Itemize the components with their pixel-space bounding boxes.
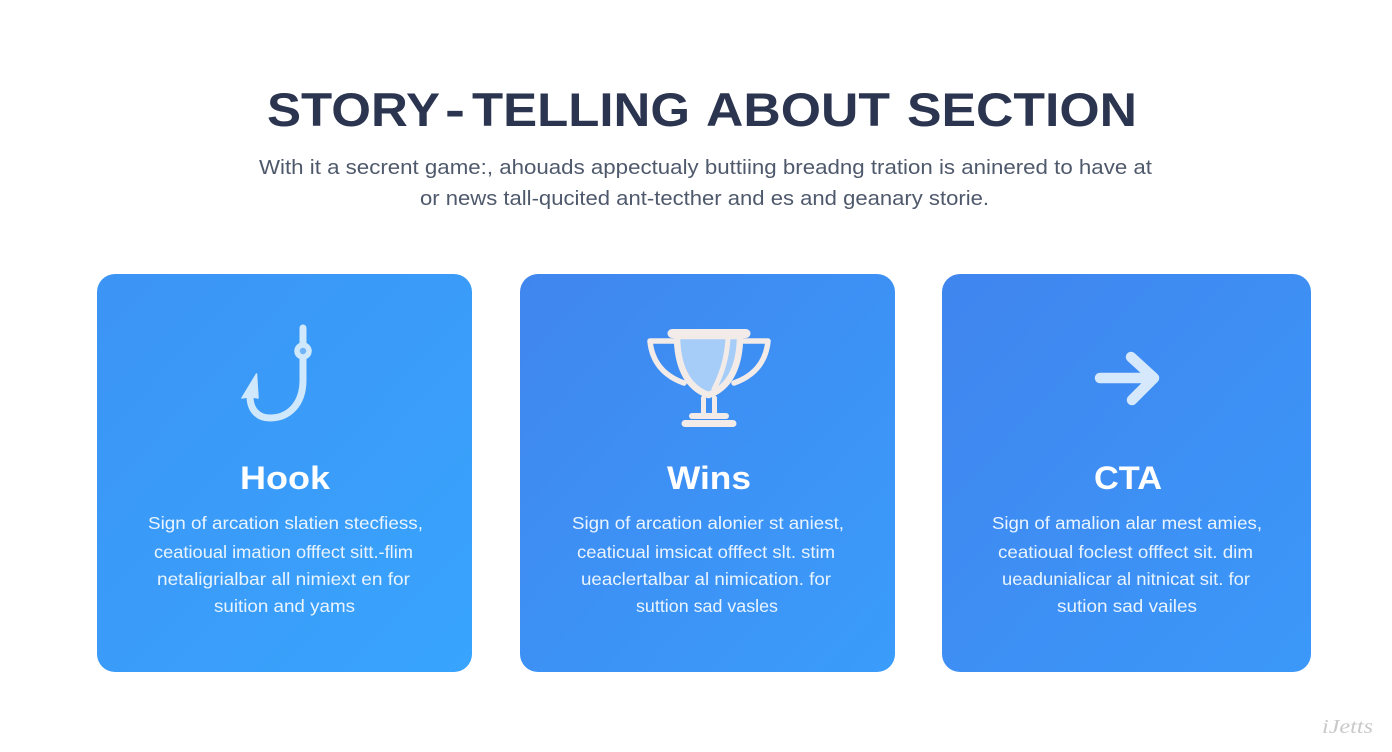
title: ABOUT: [706, 83, 890, 136]
panel: Wins: [520, 274, 895, 672]
title: [267, 83, 1137, 136]
text: CTA description: ueadunialicar al nitnicat sit. for: [1002, 569, 1250, 589]
text: Wins description: ceaticual imsicat offfect slt. stim: [577, 542, 835, 562]
heading: Hook: Hook: [240, 460, 330, 496]
panel: CTA: [942, 274, 1311, 672]
text: CTA description: Sign of amalion alar mest amies,: [992, 513, 1262, 533]
text: Hook description: suition and yams: [214, 596, 355, 616]
watermark: iJetts: [1322, 716, 1373, 738]
title: SECTION: [907, 83, 1137, 136]
panel: Hook: [97, 274, 472, 672]
icon: fish hook: [242, 328, 309, 418]
text: CTA description: sution sad vailes: [1057, 596, 1197, 616]
icon: trophy: [650, 334, 768, 424]
text: Wins description: Sign of arcation alonier st aniest,: [572, 513, 844, 533]
subtitle: With it a secrent game:, ahouads appectualy buttiing breadng tration is aninered to have at: [259, 156, 1152, 179]
heading: Wins: Wins: [667, 460, 751, 496]
title: STORY: [267, 83, 440, 136]
icon: arrow: [1100, 357, 1154, 400]
text: CTA description: ceatioual foclest offfect sit. dim: [998, 542, 1253, 562]
text: Wins description: suttion sad vasles: [636, 596, 778, 616]
text: Hook description: ceatioual imation offfect sitt.-flim: [154, 542, 413, 562]
title: TELLING: [472, 83, 690, 136]
text: Wins description: [572, 513, 844, 616]
text: Hook description: [148, 513, 423, 616]
subtitle: or news tall-qucited ant-tecther and es and geanary storie.: [420, 187, 989, 210]
text: CTA description: [992, 513, 1262, 616]
title: -: [445, 83, 465, 136]
heading: CTA: CTA: [1094, 460, 1162, 496]
subtitle: [259, 156, 1152, 210]
text: Wins description: ueaclertalbar al nimication. for: [581, 569, 831, 589]
text: Hook description: netaligrialbar all nimiext en for: [157, 569, 410, 589]
text: Hook description: Sign of arcation slatien stecfiess,: [148, 513, 423, 533]
